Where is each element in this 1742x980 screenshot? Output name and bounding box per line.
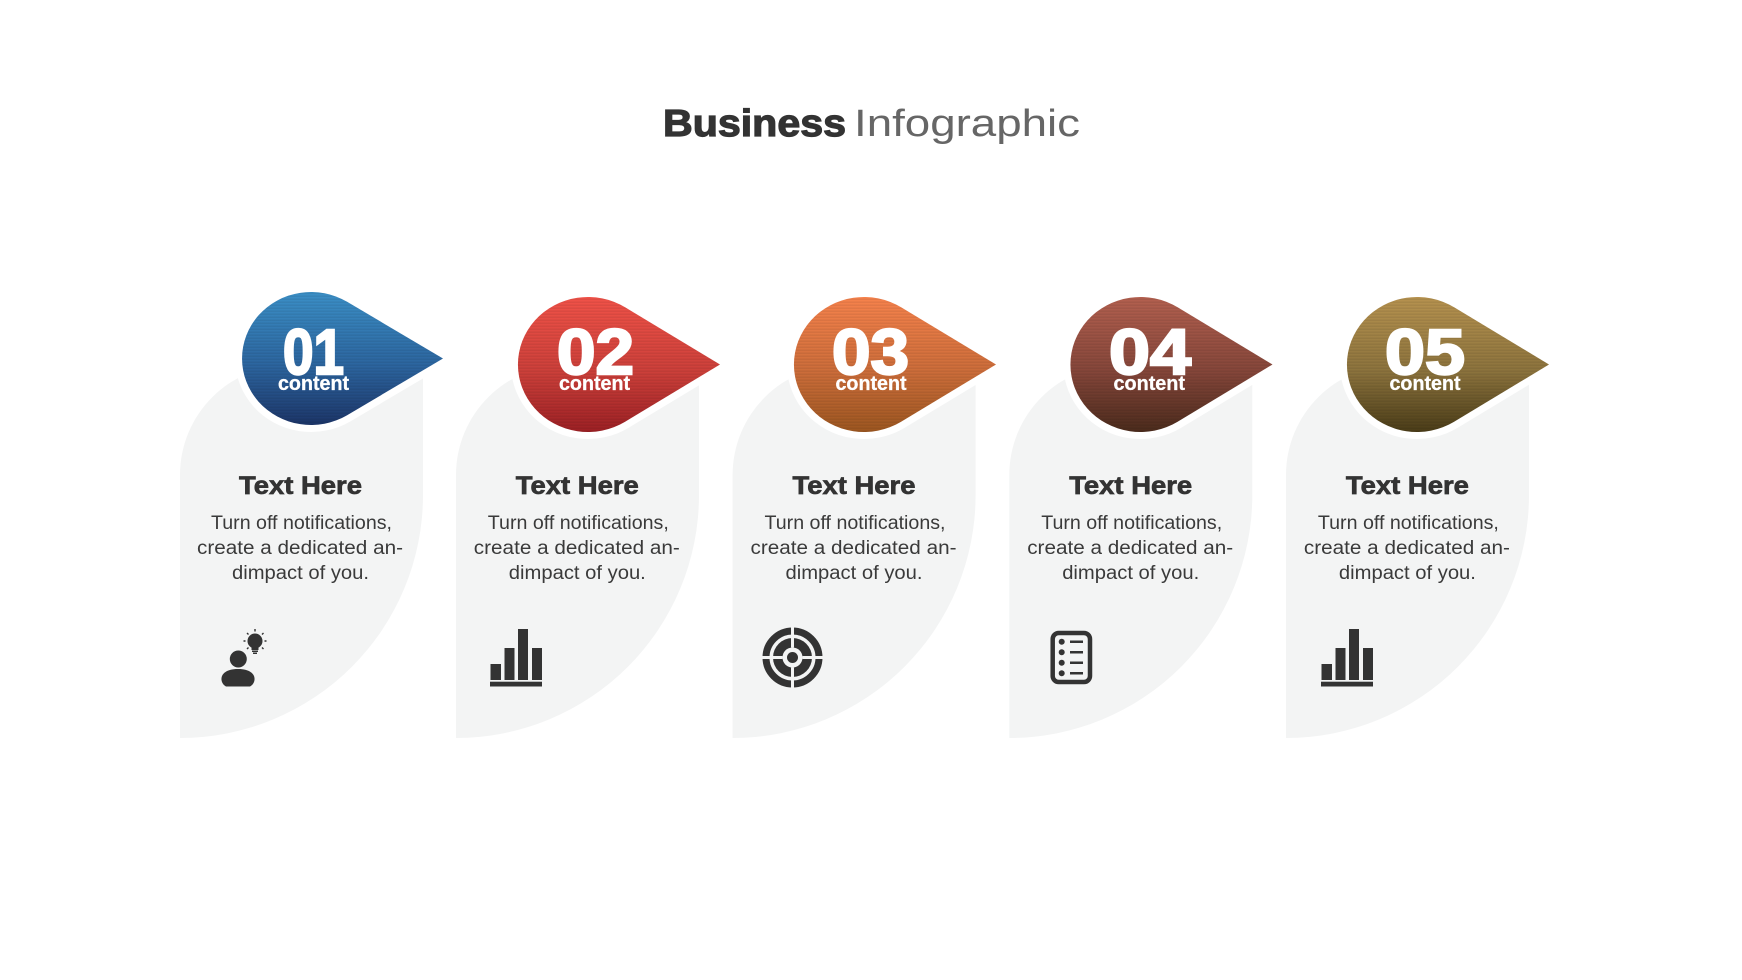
badge: 01: content [278, 373, 349, 395]
text block: Turn off notifications, [1318, 513, 1499, 534]
badge: 03: content [836, 373, 907, 395]
text block: dimpact of you. [786, 563, 922, 584]
panel: step 04 [1009, 297, 1272, 738]
text block [474, 472, 680, 584]
text block [197, 472, 403, 584]
text block [750, 472, 956, 584]
card background [180, 365, 423, 738]
title [663, 103, 1080, 145]
card background [1009, 365, 1252, 738]
text block: dimpact of you. [1062, 563, 1199, 584]
panel: step 02 [456, 297, 720, 738]
text block: dimpact of you. [232, 563, 369, 584]
badge: 01: 01 [283, 316, 344, 388]
text block: Turn off notifications, [488, 513, 669, 534]
card background [1286, 365, 1529, 738]
badge: 05: content [1390, 373, 1461, 395]
icon: bar chart [1321, 629, 1373, 686]
panel: step 01 [180, 292, 443, 738]
panel: step 05 [1286, 297, 1549, 738]
badge: 03 [794, 297, 996, 432]
icon: target [761, 626, 824, 689]
badge: 04: 04 [1109, 316, 1191, 388]
badge: 05: 05 [1385, 316, 1465, 388]
text block: create a dedicated an- [1027, 538, 1233, 559]
badge: 02: 02 [557, 316, 634, 388]
badge: 04: content [1114, 373, 1185, 395]
text block: dimpact of you. [509, 563, 646, 584]
panel: step 03 [733, 297, 996, 738]
text block: Turn off notifications, [1041, 513, 1222, 534]
text block: Text Here [792, 472, 916, 500]
text block: create a dedicated an- [1304, 538, 1510, 559]
icon: bar chart [490, 629, 542, 686]
icon: person with light bulb [221, 629, 266, 686]
badge: 03: 03 [832, 316, 909, 388]
text block: create a dedicated an- [197, 538, 403, 559]
text block: Turn off notifications, [764, 513, 946, 534]
text block: dimpact of you. [1339, 563, 1476, 584]
text block: create a dedicated an- [474, 538, 680, 559]
text block: Text Here [516, 472, 639, 500]
text block: create a dedicated an- [750, 538, 956, 559]
text block: Text Here [239, 472, 362, 500]
card background [733, 365, 976, 738]
title: Business [663, 103, 846, 145]
text block [1304, 472, 1510, 584]
badge: 04 [1070, 297, 1272, 432]
card background [456, 365, 699, 738]
text block [1027, 472, 1233, 584]
icon: checklist [1053, 633, 1090, 682]
text block: Text Here [1346, 472, 1469, 500]
badge: 01 [242, 292, 443, 425]
badge: 05 [1347, 297, 1549, 432]
badge: 02 [518, 297, 720, 432]
title: Infographic [854, 103, 1080, 145]
badge: 02: content [559, 373, 630, 395]
text block: Text Here [1069, 472, 1192, 500]
text block: Turn off notifications, [211, 513, 392, 534]
